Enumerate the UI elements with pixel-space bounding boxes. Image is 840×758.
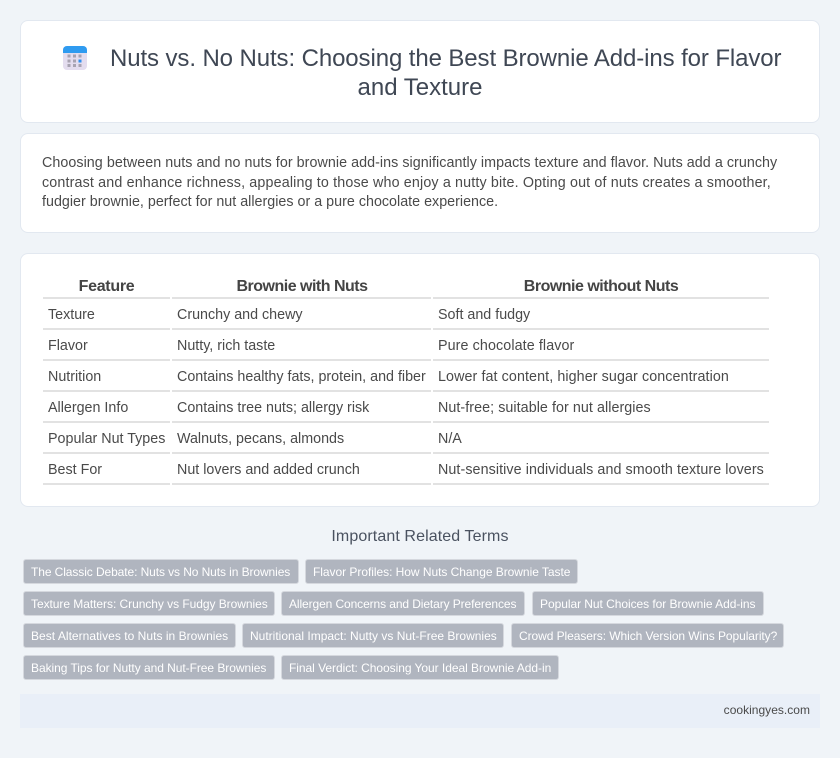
footer bar [20,694,820,728]
comparison table: Crunchy and chewy [177,307,303,323]
comparison table: Popular Nut Types [48,431,165,447]
comparison table: Soft and fudgy [438,307,530,323]
comparison table: Nutty, rich taste [177,338,275,354]
comparison table: Lower fat content, higher sugar concentration [438,369,729,385]
related terms tags: Baking Tips for Nutty and Nut-Free Brownies [31,661,266,675]
title [110,45,782,101]
intro panel [20,133,820,233]
comparison table: Contains tree nuts; allergy risk [177,400,369,416]
comparison table: Brownie without Nuts [524,278,678,295]
footer source: cookingyes.com [724,703,810,717]
related terms tags [23,559,784,680]
intro text: Choosing between nuts and no nuts for brownie add-ins significantly impacts texture and flavor. Nuts add a crunchy [42,155,777,171]
related terms tags: Flavor Profiles: How Nuts Change Brownie Taste [313,565,570,579]
comparison table: Contains healthy fats, protein, and fiber [177,369,426,385]
comparison table: Walnuts, pecans, almonds [177,431,344,447]
intro text [42,155,778,210]
related terms heading: Important Related Terms [331,528,509,545]
comparison table [43,278,769,485]
icon: calendar [63,46,87,70]
comparison table: Flavor [48,338,88,354]
related terms tags: Crowd Pleasers: Which Version Wins Popularity? [519,629,777,643]
intro text: fudgier brownie, perfect for nut allergies or a pure chocolate experience. [42,194,498,210]
table header: Feature [79,278,134,295]
comparison table: Allergen Info [48,400,128,416]
table panel [20,253,820,507]
related terms tags: Texture Matters: Crunchy vs Fudgy Brownies [31,597,268,611]
comparison table: Best For [48,462,102,478]
related terms tags: Allergen Concerns and Dietary Preferences [289,597,516,611]
comparison table: Nut-free; suitable for nut allergies [438,400,651,416]
header panel [20,20,820,123]
related terms tags: Nutritional Impact: Nutty vs Nut-Free Brownies [250,629,497,643]
related terms tags: Best Alternatives to Nuts in Brownies [31,629,228,643]
comparison table: Nut-sensitive individuals and smooth texture lovers [438,462,764,478]
comparison table: Nutrition [48,369,101,385]
intro text: contrast and enhance richness, appealing to those who enjoy a nutty bite. Opting out of nuts creates a smoother, [42,174,771,190]
title: and Texture [358,74,482,101]
related terms tags: The Classic Debate: Nuts vs No Nuts in Brownies [31,565,290,579]
title: Nuts vs. No Nuts: Choosing the Best Brownie Add-ins for Flavor [110,45,781,72]
comparison table: N/A [438,431,462,447]
related terms tags: Final Verdict: Choosing Your Ideal Brownie Add-in [289,661,551,675]
comparison table: Pure chocolate flavor [438,338,574,354]
related terms tags: Popular Nut Choices for Brownie Add-ins [540,597,756,611]
comparison table: Brownie with Nuts [236,278,368,295]
comparison table: Nut lovers and added crunch [177,462,360,478]
comparison table: Texture [48,307,95,323]
